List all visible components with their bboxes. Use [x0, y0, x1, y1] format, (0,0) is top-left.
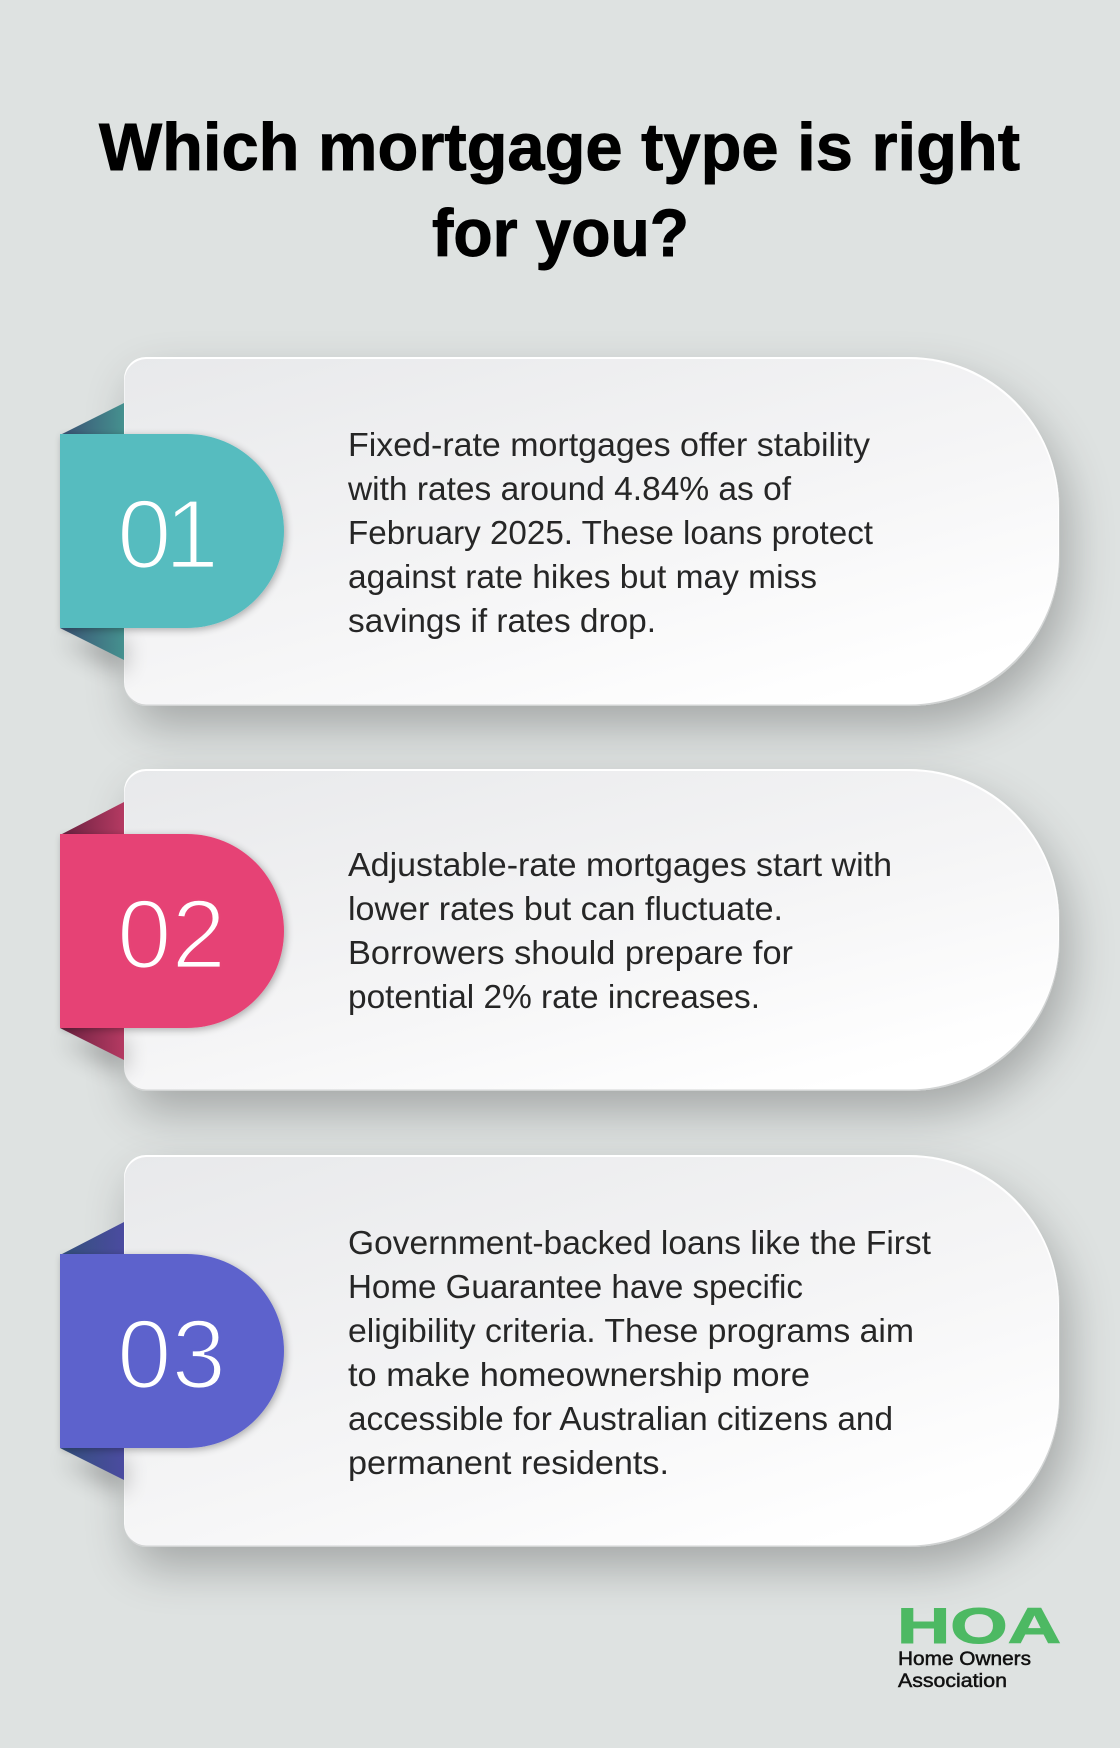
- number badge 01: 01: [117, 479, 215, 589]
- number badge 03: 03: [117, 1299, 226, 1409]
- text: government-backed description: accessible for Australian citizens and: [348, 1400, 893, 1437]
- card body 2: [124, 769, 1060, 1091]
- text: fixed-rate description: against rate hikes but may miss: [348, 558, 817, 595]
- text: adjustable-rate description: [348, 846, 892, 1015]
- logo: HOA Home Owners Association: HOA: [897, 1598, 1061, 1654]
- text: adjustable-rate description: Borrowers should prepare for: [348, 934, 793, 971]
- text: fixed-rate description: February 2025. These loans protect: [348, 514, 873, 551]
- card body 1: [124, 357, 1060, 706]
- card body 3: [124, 1155, 1060, 1547]
- number badge 03: [60, 1254, 284, 1448]
- text: adjustable-rate description: potential 2% rate increases.: [348, 978, 760, 1015]
- panel: fixed-rate mortgages: [60, 357, 1060, 706]
- title: for you?: [432, 196, 689, 271]
- text: adjustable-rate description: Adjustable-rate mortgages start with: [348, 846, 892, 883]
- title: [99, 110, 1020, 271]
- text: government-backed description: Government-backed loans like the First: [348, 1224, 931, 1261]
- logo: HOA Home Owners Association: Home Owners: [898, 1648, 1031, 1670]
- logo: HOA Home Owners Association: Association: [898, 1670, 1007, 1692]
- ribbon fold 1: [60, 403, 124, 672]
- number badge 02: [60, 834, 284, 1028]
- ribbon fold 2: [60, 802, 124, 1072]
- panel: adjustable-rate mortgages: [60, 769, 1060, 1091]
- ribbon fold 3: [60, 1222, 124, 1492]
- text: government-backed description: to make homeownership more: [348, 1356, 810, 1393]
- text: government-backed description: eligibility criteria. These programs aim: [348, 1312, 914, 1349]
- logo: HOA Home Owners Association: [897, 1598, 1061, 1692]
- text: adjustable-rate description: lower rates but can fluctuate.: [348, 890, 783, 927]
- text: government-backed description: Home Guarantee have specific: [348, 1268, 803, 1305]
- panel: government-backed loans: [60, 1155, 1060, 1547]
- text: government-backed description: permanent residents.: [348, 1444, 669, 1481]
- title: Which mortgage type is right: [99, 110, 1020, 185]
- number badge 02: 02: [117, 879, 226, 989]
- text: fixed-rate description: with rates around 4.84% as of: [347, 470, 792, 507]
- text: fixed-rate description: [347, 426, 873, 639]
- text: fixed-rate description: Fixed-rate mortgages offer stability: [348, 426, 871, 463]
- text: fixed-rate description: savings if rates drop.: [348, 602, 656, 639]
- number badge 01: [60, 434, 284, 628]
- text: government-backed description: [348, 1224, 931, 1481]
